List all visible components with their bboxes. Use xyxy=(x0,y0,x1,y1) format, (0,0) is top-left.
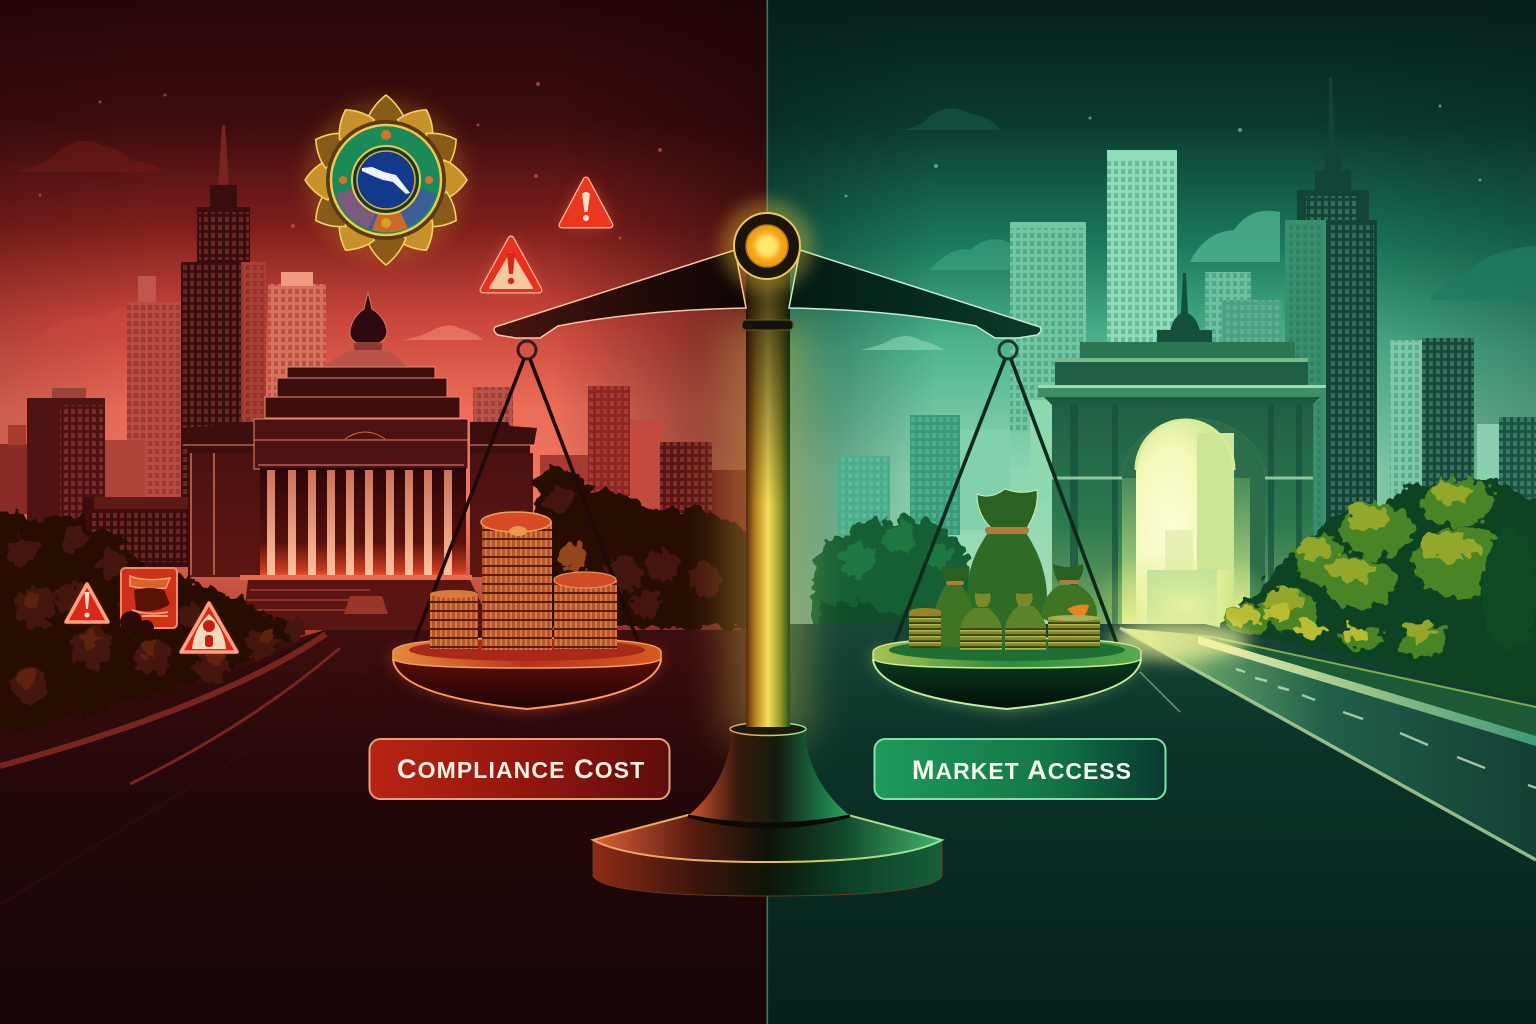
dark office block xyxy=(27,388,105,528)
scale pivot xyxy=(721,200,813,292)
seal: gold emblem xyxy=(304,95,468,265)
left bag xyxy=(933,566,975,647)
road lane xyxy=(1120,628,1536,860)
large bag xyxy=(967,489,1047,646)
label: Market Access: MARKET ACCESS xyxy=(912,755,1132,785)
ground: right road xyxy=(768,620,1536,1024)
skyline: far red buildings xyxy=(0,272,752,550)
icon: warning triangle lock xyxy=(181,603,237,652)
left pan glow xyxy=(392,652,662,709)
arch attic xyxy=(1055,342,1308,386)
stars: red sky xyxy=(38,82,702,264)
lane dashes xyxy=(1236,669,1536,788)
right pan glow xyxy=(872,652,1142,709)
green coin stacks xyxy=(909,608,1100,650)
right bag xyxy=(1042,564,1097,623)
palace stairs xyxy=(242,580,494,630)
scale base xyxy=(593,722,942,896)
icon: warning triangle middle xyxy=(483,239,539,290)
road edge line xyxy=(1120,628,1536,860)
scale pole glow xyxy=(725,320,809,740)
road bright band xyxy=(1198,636,1536,746)
skyline: far green buildings xyxy=(838,150,1536,570)
divider: center line xyxy=(766,0,768,1024)
trees: left grove xyxy=(0,513,307,732)
label: Compliance Cost xyxy=(370,739,670,799)
label: Market Access xyxy=(874,739,1166,799)
office tower middle right xyxy=(1390,338,1474,570)
office tower far right xyxy=(1477,417,1536,527)
label: Compliance Cost: COMPLIANCE COST xyxy=(397,754,645,784)
icon: permit square xyxy=(120,568,177,636)
building: government palace xyxy=(83,293,537,630)
right money bags xyxy=(909,489,1100,650)
skyscraper: tall dark tower xyxy=(181,125,266,512)
panel: green right background xyxy=(768,0,1536,1024)
arch finial xyxy=(1157,273,1212,342)
trees: right of palace xyxy=(535,466,759,628)
icon: warning triangle upper xyxy=(562,180,610,225)
right hanging chains xyxy=(893,341,1118,647)
trees: near-side green grove xyxy=(1205,478,1536,712)
left coins xyxy=(430,512,617,650)
clouds: red sky xyxy=(20,141,483,340)
ground: left road xyxy=(0,630,768,1024)
palace wings xyxy=(183,422,537,577)
trees: far-side green grove xyxy=(812,517,980,630)
scale: complete balance xyxy=(392,200,1142,896)
skyscraper: green tower xyxy=(1285,78,1377,540)
palace stepped roof xyxy=(265,367,460,418)
clouds: green sky xyxy=(860,108,1536,350)
panel: red left background xyxy=(0,0,768,1024)
low block left of palace xyxy=(83,497,188,567)
palace dome xyxy=(323,293,407,367)
scale column xyxy=(742,270,793,727)
arch opening: light xyxy=(1136,420,1234,625)
arch jambs xyxy=(1122,478,1250,625)
roadside wall xyxy=(1205,638,1536,740)
right pan xyxy=(873,638,1141,709)
arch road glow xyxy=(1110,620,1250,660)
columns: glowing portico xyxy=(267,470,452,575)
left pan xyxy=(393,628,661,709)
arch cornice xyxy=(1038,385,1326,405)
arch piers xyxy=(1052,405,1313,625)
left hanging chains xyxy=(412,341,640,647)
building: triumphal arch xyxy=(1038,273,1326,660)
stars: green sky xyxy=(844,104,1482,198)
small bags xyxy=(960,593,1046,632)
arch ring xyxy=(1122,418,1265,625)
scale beam right xyxy=(789,250,1041,338)
icon: warning triangle lower left xyxy=(66,584,108,622)
seal islands xyxy=(362,167,410,194)
scale beam left xyxy=(494,250,746,338)
palace entablature xyxy=(254,419,468,469)
seal leaves xyxy=(305,95,467,265)
